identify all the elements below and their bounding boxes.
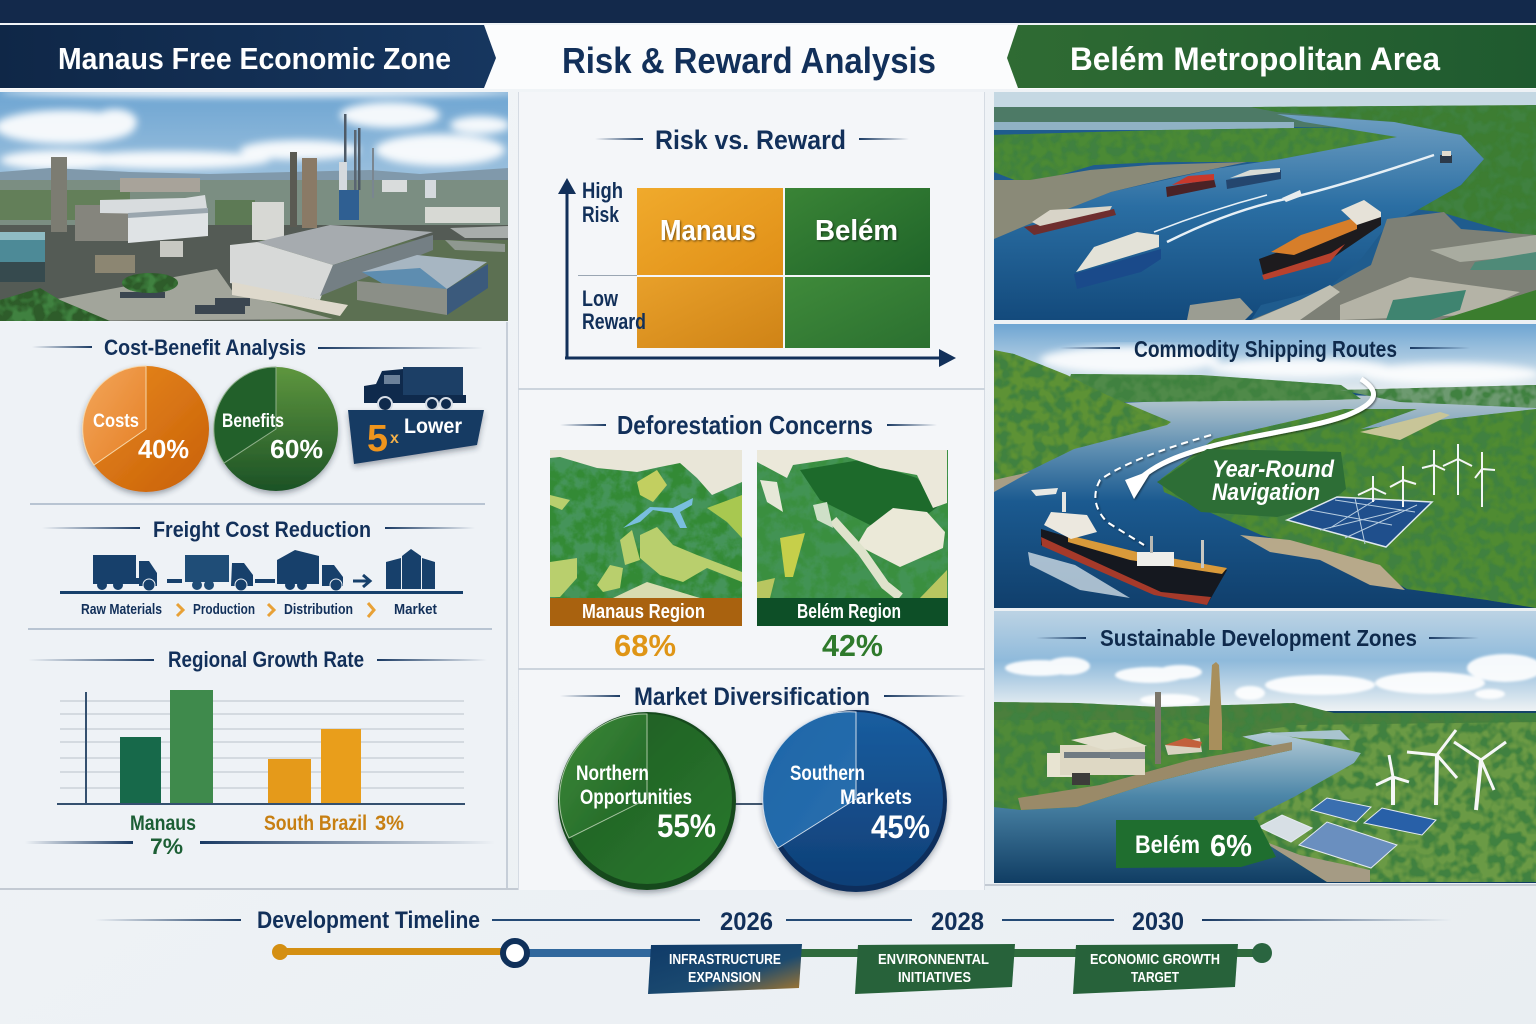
risk-reward matrix: [558, 178, 956, 367]
header: Manaus Free Economic Zone: Manaus Free Economic Zone: [58, 41, 451, 76]
forest: [994, 702, 1536, 882]
risk-reward matrix: Risk: [582, 202, 620, 227]
towers: [1155, 662, 1222, 764]
milestone: Infrastructure Expansion: EXPANSION: [688, 969, 761, 986]
pie chart: Southern Markets 45%: [763, 710, 947, 892]
header: Belém Metropolitan Area: Belém Metropolitan Area: [1070, 41, 1440, 77]
pie chart: Northern Opportunities 55%: [558, 712, 736, 890]
heading: Risk vs. Reward: Risk vs. Reward: [655, 125, 846, 155]
heading: Development Timeline: Development Timeline: [257, 907, 480, 934]
icon: cargo ship: [1028, 492, 1227, 605]
building: [1047, 732, 1202, 785]
icon: sailboat: [1031, 488, 1058, 496]
icon: arrow: [353, 575, 370, 587]
timeline track: [272, 941, 1272, 965]
callout: Year-Round Navigation: Year-Round: [1212, 456, 1335, 483]
bar chart: regional growth: South Brazil: [264, 812, 367, 835]
freight flow diagram: Production: [193, 601, 255, 618]
milestone: Economic Growth Target: TARGET: [1131, 969, 1179, 986]
pie chart: Northern Opportunities 55%: 55%: [657, 808, 716, 844]
river: [994, 395, 1536, 608]
year: 2030: 2030: [1132, 908, 1184, 936]
milestone: Environmental Initiatives: [855, 944, 1015, 994]
callout: Belém 6%: [1116, 820, 1276, 868]
warehouse: [230, 225, 488, 316]
heading: Cost-Benefit Analysis: Cost-Benefit Analysis: [104, 335, 306, 360]
pie chart: Costs 40%: [83, 366, 209, 492]
map: Belém Region 42%: Belém Region: [797, 601, 901, 623]
freight flow diagram: Raw Materials: [81, 601, 162, 618]
milestone: Economic Growth Target: ECONOMIC GROWTH: [1090, 951, 1220, 968]
photo: Manaus industrial zone: [0, 87, 520, 321]
right port: [1187, 212, 1536, 320]
sand bank: [1268, 843, 1370, 882]
pie chart: Costs 40%: 40%: [138, 434, 189, 464]
callout: Belém 6%: 6%: [1210, 828, 1252, 863]
heading: Regional Growth Rate: Regional Growth Rate: [168, 647, 364, 672]
map: Belém Region 42%: 42%: [822, 628, 883, 663]
risk-reward matrix: Low: [582, 286, 619, 311]
milestone: Environmental Initiatives: INITIATIVES: [898, 969, 971, 986]
timeline: [95, 907, 1452, 994]
trees: [0, 273, 178, 321]
photo: shipping routes: [994, 324, 1536, 608]
bar chart: regional growth: [25, 690, 495, 859]
freight flow diagram: Market: [394, 601, 437, 618]
icon: wind turbines: [1358, 444, 1495, 507]
pie chart: Benefits 60%: Benefits: [222, 411, 284, 432]
icon: market buildings: [386, 549, 435, 589]
icon: truck 1: [93, 555, 157, 591]
freight flow diagram: [60, 549, 463, 618]
pie chart: Benefits 60%: [214, 367, 338, 491]
callout: Belém 6%: Belém: [1135, 831, 1200, 859]
pie chart: Benefits 60%: 60%: [270, 434, 323, 464]
bar chart: regional growth: Manaus: [130, 812, 196, 835]
bar chart: regional growth: 3%: [375, 812, 404, 835]
year: 2028: 2028: [931, 908, 984, 936]
header: Manaus Free Economic Zone: [0, 25, 496, 88]
map: Manaus Region 68%: 68%: [614, 628, 676, 663]
callout: Year-Round Navigation: Navigation: [1212, 479, 1320, 506]
callout: 5x lower freight: Lower: [404, 415, 462, 438]
pie chart: Northern Opportunities 55%: Opportunities: [580, 786, 692, 809]
forest: [994, 105, 1536, 240]
risk-reward matrix: High: [582, 178, 623, 203]
pale waterline: [1262, 730, 1350, 740]
icon: solar panels: [1259, 798, 1436, 868]
pie chart: Costs 40%: Costs: [93, 411, 139, 432]
pie chart: Southern Markets 45%: Southern: [790, 762, 865, 785]
ship wakes: [1154, 155, 1434, 242]
map: Manaus Region 68%: Manaus Region: [582, 601, 705, 623]
icon: truck 3: [277, 550, 343, 591]
callout: Year-Round Navigation: [1157, 449, 1346, 517]
dock: [1018, 742, 1292, 810]
milestone: Infrastructure Expansion: INFRASTRUCTURE: [669, 951, 781, 968]
map: Manaus Region 68%: [550, 450, 742, 663]
callout: 5x lower freight: [348, 367, 484, 464]
forest: [994, 350, 1536, 608]
river: [994, 114, 1484, 320]
milestone: Economic Growth Target: [1073, 944, 1238, 994]
photo: Belém river port: [994, 92, 1536, 320]
icon: solar array: [1287, 497, 1432, 547]
header band: [0, 25, 1536, 89]
heading: Freight Cost Reduction: Freight Cost Reduction: [153, 517, 371, 542]
photo: sustainable development zones: [994, 611, 1536, 883]
milestone: Infrastructure Expansion: [648, 944, 802, 994]
sand flats: [994, 412, 1450, 590]
heading: Deforestation Concerns: Deforestation Concerns: [617, 410, 873, 440]
heading: Market Diversification: Market Diversification: [634, 683, 870, 711]
ships: [1024, 151, 1452, 289]
header: Belém Metropolitan Area: [1007, 25, 1536, 88]
title: Risk & Reward Analysis: Risk & Reward Analysis: [562, 40, 936, 81]
year: 2026: 2026: [720, 908, 773, 936]
panel: left analysis: [0, 322, 518, 890]
icon: wind turbines: [1376, 730, 1506, 810]
bar chart: regional growth: 7%: [150, 834, 183, 859]
milestone: Environmental Initiatives: ENVIRONNENTAL: [878, 951, 989, 968]
risk-reward matrix: Reward: [582, 309, 646, 334]
pie chart: Northern Opportunities 55%: Northern: [576, 762, 649, 785]
heading: Sustainable Development Zones: Sustainable Development Zones: [1100, 625, 1417, 651]
icon: truck: [364, 367, 466, 411]
pie chart: Southern Markets 45%: 45%: [871, 809, 930, 845]
map: Belém Region 42%: [757, 450, 948, 663]
factory buildings: [0, 195, 508, 282]
callout: 5x lower freight: 5: [367, 418, 388, 460]
callout: 5x lower freight: x: [390, 430, 399, 447]
pie chart: Southern Markets 45%: Markets: [840, 786, 912, 809]
arrow: shipping route: [1095, 379, 1374, 545]
risk-reward matrix: Belém: [815, 215, 898, 247]
icon: truck 2: [185, 555, 253, 591]
freight flow diagram: Distribution: [284, 601, 353, 618]
parking lot: [57, 269, 333, 321]
risk-reward matrix: Manaus: [660, 215, 756, 247]
left port: [994, 162, 1247, 239]
panel: center column: [518, 92, 985, 892]
heading: Commodity Shipping Routes: Commodity Shipping Routes: [1134, 336, 1397, 362]
industrial towers: [51, 114, 436, 240]
